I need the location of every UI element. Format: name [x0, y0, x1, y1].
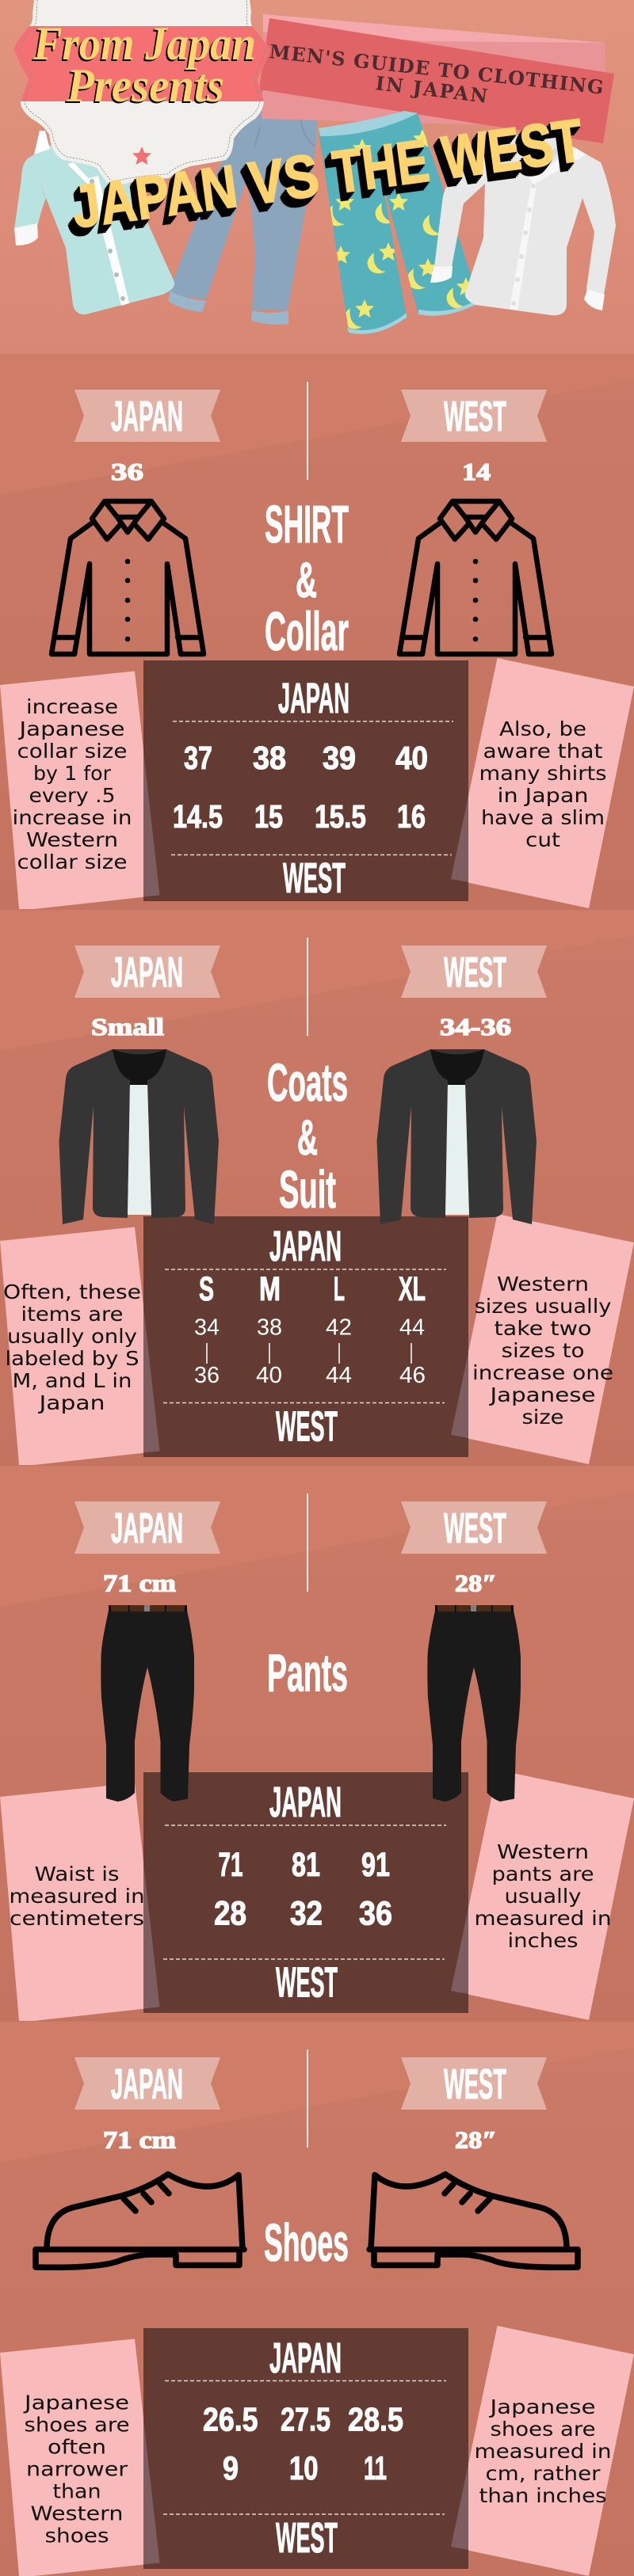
title: japan vs the west: THE	[329, 127, 433, 207]
note text: right: measured in	[474, 1907, 612, 1930]
title: japan vs the west: WEST	[438, 107, 587, 192]
note text: left: often	[48, 2436, 106, 2458]
size table panel: 32	[290, 1894, 323, 1932]
note text: left: shoes are	[24, 2414, 130, 2436]
note text: right: Western	[497, 1273, 589, 1296]
heading: shirt and collar: &	[296, 553, 317, 608]
note text: left: shoes	[44, 2525, 109, 2547]
ribbon: west: WEST	[444, 393, 506, 440]
heading: shoes: Shoes	[264, 2213, 349, 2273]
note text: right: have a slim	[481, 806, 605, 829]
west size label: 28″	[455, 1570, 497, 1596]
note: left	[0, 2339, 160, 2576]
note text: right: Western	[497, 1840, 589, 1863]
size table panel: 44	[326, 1363, 352, 1388]
note: left	[0, 1227, 160, 1465]
note: right	[451, 2326, 634, 2576]
icon: jacket japan	[59, 1049, 219, 1224]
section: pants	[0, 1466, 634, 2022]
note text: right: than inches	[479, 2484, 607, 2507]
note text: left: narrower	[26, 2458, 128, 2480]
note text: right	[472, 1273, 613, 1429]
ribbon: japan	[74, 1501, 220, 1554]
ribbon: west: WEST	[444, 1505, 506, 1552]
size table panel: 28	[214, 1894, 246, 1932]
note text: right: aware that	[483, 740, 603, 763]
size table panel: 26.5	[203, 2401, 258, 2437]
note text: left: Japanese	[23, 2391, 129, 2414]
note text: right: pants are	[491, 1863, 594, 1885]
section: shirt and collar	[0, 354, 634, 910]
size table panel: 15.5	[315, 798, 366, 835]
note text: right: size	[521, 1406, 564, 1429]
icon: jacket west	[377, 1049, 537, 1224]
note text: left: collar size	[17, 740, 127, 763]
note text: left: usually only	[7, 1325, 137, 1348]
size table panel	[143, 1216, 468, 1457]
size table panel: JAPAN	[269, 1223, 342, 1270]
banner back panel	[262, 14, 605, 127]
banner text: IN JAPAN	[374, 71, 489, 108]
note text: left: items are	[21, 1303, 124, 1326]
size table panel: WEST	[276, 2514, 338, 2562]
heading: coats and suit: Suit	[279, 1160, 336, 1220]
size table panel: 40	[256, 1363, 282, 1388]
heading: pants: Pants	[267, 1644, 348, 1703]
illustration: blue jeans	[168, 87, 319, 325]
note text: left: Western	[30, 2502, 124, 2525]
note text: left: increase	[26, 695, 118, 718]
title: japan vs the west: JAPAN	[68, 153, 241, 242]
ribbon: japan	[74, 390, 220, 442]
size table panel: 81	[292, 1846, 320, 1884]
size table panel: 28.5	[348, 2401, 403, 2437]
heading: coats and suit	[267, 1053, 348, 1220]
banner: men's guide	[259, 18, 614, 143]
west size label: 14	[462, 458, 491, 485]
note text: right: Japanese	[488, 2395, 596, 2418]
note text: right	[474, 1840, 612, 1952]
size table panel: 11	[364, 2449, 387, 2487]
note text: left	[13, 695, 132, 873]
heading: shirt and collar: SHIRT	[265, 495, 349, 554]
size table panel: 40	[395, 740, 428, 776]
ribbon: japan: JAPAN	[111, 1505, 183, 1552]
note: left	[0, 672, 160, 909]
note text: left: centimeters	[10, 1907, 144, 1930]
note text: right: many shirts	[479, 762, 607, 785]
note text: right	[479, 717, 607, 851]
note text: left: M, and L in	[13, 1369, 132, 1392]
note text: right: sizes usually	[474, 1295, 612, 1318]
size table panel: 10	[289, 2449, 319, 2487]
note text: left: Western	[26, 828, 118, 851]
icon: pants japan	[101, 1605, 194, 1802]
heading: from japan presents	[32, 17, 256, 112]
heading: shirt and collar: Collar	[265, 601, 349, 662]
size table panel: 42	[326, 1315, 352, 1340]
note text: right: usually	[504, 1885, 582, 1908]
size table panel	[143, 2328, 468, 2569]
badge: from japan presents	[13, 0, 270, 185]
illustration: mint shirt	[14, 131, 174, 314]
note text: left: than	[52, 2480, 101, 2502]
west size label: 28″	[455, 2125, 497, 2154]
note text: left: measured in	[10, 1885, 144, 1908]
size table panel: S	[199, 1270, 214, 1308]
size table panel: 34	[194, 1315, 220, 1340]
note text: right: measured in	[474, 2440, 612, 2463]
size table panel: 36	[194, 1363, 220, 1388]
size table panel	[143, 660, 468, 902]
heading: from japan presents: Presents	[66, 59, 224, 112]
note text: left	[3, 1280, 141, 1414]
size table panel: M	[259, 1270, 281, 1308]
note text: left: Often, these	[3, 1280, 141, 1303]
size table panel: 38	[257, 1315, 282, 1340]
heading: coats and suit: Coats	[267, 1053, 348, 1113]
size table panel: JAPAN	[269, 2334, 342, 2382]
ribbon: japan: JAPAN	[111, 949, 183, 996]
note text: left: increase in	[13, 806, 132, 829]
size table panel: 15	[254, 798, 283, 835]
size table panel: XL	[399, 1270, 426, 1308]
icon: shoe west	[369, 2175, 578, 2267]
note text: left: Japan	[37, 1391, 105, 1414]
note text: right: cm, rather	[485, 2462, 601, 2485]
note text: right: in Japan	[498, 784, 588, 807]
size table panel: 36	[359, 1894, 392, 1932]
note text: left: collar size	[17, 850, 127, 873]
size table panel: 27.5	[281, 2401, 330, 2437]
size table panel: 38	[253, 740, 286, 776]
size table panel: WEST	[276, 1959, 338, 2007]
note text: left: Japanese	[17, 717, 125, 740]
icon: shoe japan	[36, 2175, 244, 2267]
ribbon: japan: JAPAN	[111, 2060, 183, 2108]
banner text: MEN'S GUIDE TO CLOTHING	[268, 40, 605, 99]
icon: shirt west	[399, 501, 552, 654]
heading: from japan presents: From Japan	[32, 17, 256, 70]
note: left	[0, 1783, 160, 2021]
size table panel: 44	[399, 1315, 425, 1340]
note text: left: labeled by S	[5, 1347, 139, 1370]
note text: right: Also, be	[499, 717, 586, 740]
note text: right: shoes are	[490, 2418, 596, 2441]
note text: right	[474, 2395, 612, 2507]
note: right	[451, 1770, 634, 2020]
size table panel	[143, 1772, 468, 2013]
note text: left: Waist is	[35, 1863, 119, 1885]
west size label: 34-36	[440, 1013, 511, 1041]
ribbon: west: WEST	[444, 949, 506, 996]
ribbon: japan	[74, 2057, 220, 2110]
size table panel: 9	[223, 2449, 239, 2487]
japan size label: 71 cm	[103, 2125, 176, 2154]
size table panel: WEST	[283, 854, 346, 902]
size table panel: 14.5	[173, 798, 223, 835]
ribbon: west	[401, 946, 547, 998]
heading: shirt and collar	[265, 495, 349, 662]
note text: right: inches	[507, 1929, 579, 1952]
size table panel: 16	[397, 798, 426, 835]
section: coats and suit	[0, 910, 634, 1466]
note text: left: every .5	[29, 784, 116, 807]
size table panel: 91	[361, 1846, 390, 1884]
ribbon: west	[401, 1501, 547, 1554]
icon: shirt japan	[52, 501, 204, 654]
japan size label: Small	[91, 1013, 164, 1041]
size table panel: 71	[219, 1846, 243, 1884]
icon: pants west	[427, 1605, 521, 1802]
note: right	[451, 658, 634, 908]
note text: right: Japanese	[488, 1383, 596, 1406]
note text: right: increase one	[472, 1361, 613, 1384]
japan size label: 71 cm	[103, 1570, 176, 1596]
note text: right: sizes to	[501, 1339, 585, 1362]
note: right	[451, 1214, 634, 1464]
size table panel: 39	[323, 740, 356, 776]
size table panel: JAPAN	[269, 1779, 342, 1826]
note text: left	[10, 1863, 144, 1930]
illustration: star and moon pajama pants	[319, 111, 479, 334]
ribbon: west	[401, 2057, 547, 2110]
ribbon: west	[401, 390, 547, 442]
japan size label: 36	[111, 458, 143, 485]
title: japan vs the west: VS	[245, 142, 323, 218]
note text: right: cut	[525, 828, 560, 851]
section: shoes	[0, 2022, 634, 2576]
note text: left: by 1 for	[33, 762, 112, 785]
heading: coats and suit: &	[297, 1110, 318, 1166]
size table panel: 46	[399, 1363, 426, 1388]
star	[132, 146, 151, 165]
size table panel: L	[334, 1270, 345, 1308]
ribbon: west: WEST	[444, 2060, 506, 2108]
size table panel: JAPAN	[278, 675, 349, 722]
note text: left	[23, 2391, 129, 2547]
ribbon: japan: JAPAN	[111, 393, 183, 440]
note text: right: take two	[495, 1317, 591, 1340]
hero background	[0, 0, 634, 354]
title: japan vs the west	[68, 107, 587, 242]
ribbon: japan	[74, 946, 220, 998]
size table panel: WEST	[276, 1403, 338, 1451]
illustration: white shirt	[430, 131, 616, 315]
size table panel: 37	[184, 740, 212, 776]
